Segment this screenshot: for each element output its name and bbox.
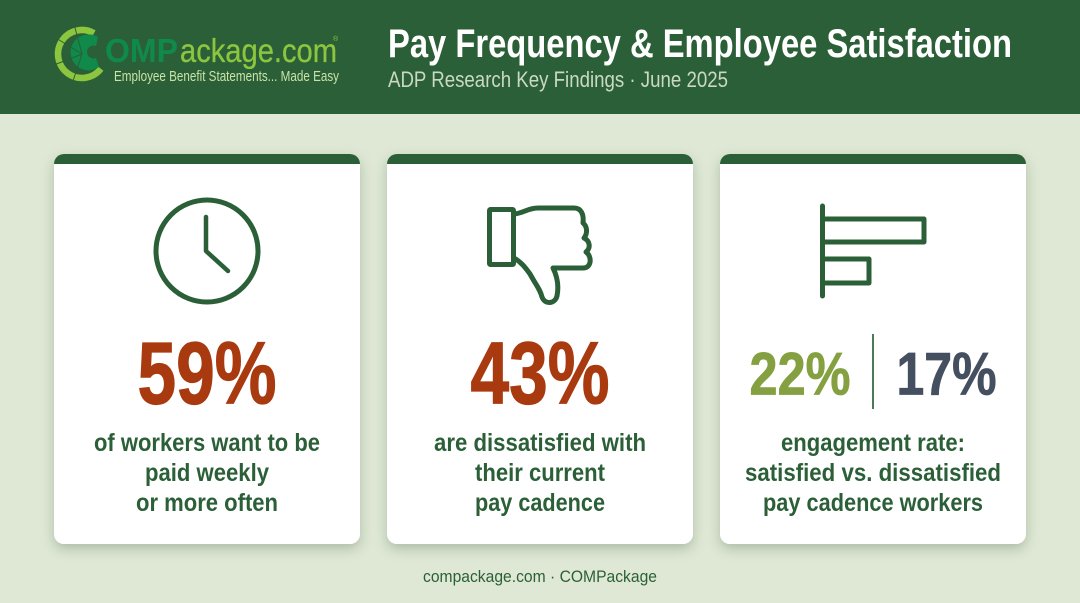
logo wordmark [105,32,339,69]
icon: clock [156,200,258,302]
caption [434,429,646,517]
header band [0,0,1080,114]
caption: their current [475,459,606,487]
logo wordmark: OMP [105,32,178,69]
caption: engagement rate: [781,429,965,457]
caption: are dissatisfied with [434,429,646,457]
caption: paid weekly [145,459,269,487]
footer: compackage.com · COMPackage [423,567,657,586]
stat: 43%: 43% [470,324,610,422]
divider [872,334,874,409]
logo wordmark: ackage.com [180,32,337,69]
stat: 22% satisfied: 22% [750,340,850,408]
subtitle: ADP Research Key Findings · June 2025 [388,67,728,92]
logo wordmark: ® [333,35,339,43]
stat: 59%: 59% [138,324,276,422]
caption: or more often [136,489,278,517]
logo tagline: Employee Benefit Statements... Made Easy [114,69,340,85]
icon: bar chart [822,206,924,296]
caption: pay cadence workers [763,489,983,517]
caption [94,429,320,517]
panel: dissatisfied workers [387,154,693,544]
panel: engagement rate [720,154,1026,544]
icon: thumbs down [490,208,590,303]
caption: of workers want to be [94,429,320,457]
caption: satisfied vs. dissatisfied [745,459,1001,487]
panel: workers wanting weekly pay [54,154,360,544]
logo mark [54,24,101,84]
stat: 17% dissatisfied: 17% [896,340,996,408]
caption [745,429,1001,517]
caption: pay cadence [475,489,605,517]
logo [54,24,340,85]
